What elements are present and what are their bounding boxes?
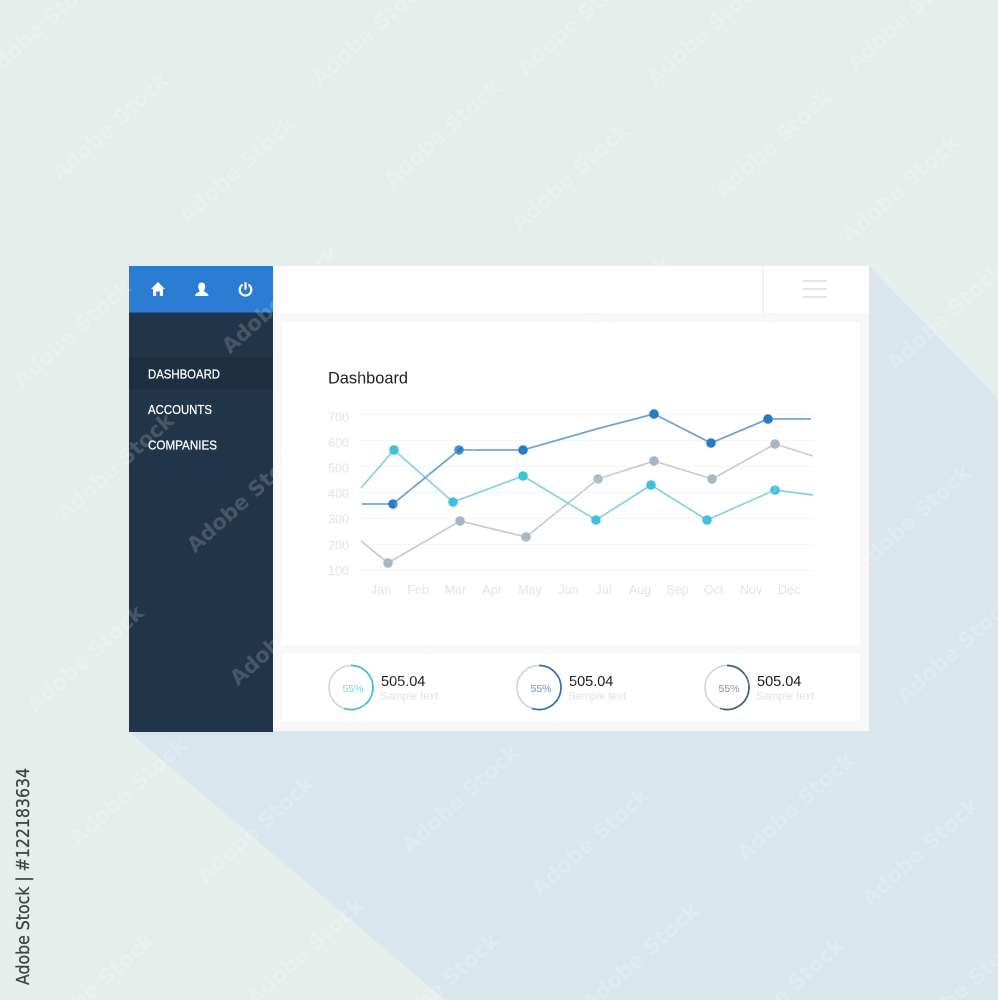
y axis labels: 500 bbox=[328, 462, 349, 476]
long shadow bbox=[129, 266, 998, 1000]
y axis labels bbox=[328, 410, 349, 578]
x axis labels: Aug bbox=[629, 583, 651, 597]
stat 3: Sample text bbox=[756, 690, 814, 702]
stat 2 bbox=[517, 666, 626, 710]
heading: Dashboard bbox=[328, 370, 408, 388]
y axis labels: 100 bbox=[328, 564, 349, 578]
icon: power bbox=[240, 283, 251, 296]
watermarks: Adobe Stock bbox=[837, 130, 964, 247]
watermarks: Adobe Stock bbox=[182, 440, 309, 557]
watermarks: Adobe Stock bbox=[689, 615, 816, 732]
stat 3: 55% bbox=[718, 683, 740, 695]
stat 2: 505.04 bbox=[569, 674, 613, 690]
x axis labels: Oct bbox=[704, 583, 724, 597]
line chart bbox=[328, 409, 813, 597]
stat 3 bbox=[705, 666, 814, 710]
watermarks: Adobe Stock bbox=[397, 740, 524, 857]
panel: stats card bbox=[282, 654, 860, 721]
watermarks: Adobe Stock bbox=[355, 608, 482, 725]
panel: chart card bbox=[282, 322, 860, 645]
watermarks: Adobe Stock bbox=[65, 733, 192, 850]
watermarks: Adobe Stock bbox=[710, 85, 837, 202]
x axis labels: Feb bbox=[407, 583, 429, 597]
stat 2: Sample text bbox=[568, 690, 626, 702]
watermarks: Adobe Stock bbox=[732, 748, 859, 865]
x axis labels: Apr bbox=[482, 583, 502, 597]
x axis labels: May bbox=[518, 583, 543, 597]
icon: user bbox=[195, 282, 208, 296]
watermarks: Adobe Stock bbox=[52, 408, 179, 525]
nav item: dashboard: DASHBOARD bbox=[148, 368, 220, 382]
x axis labels bbox=[371, 583, 800, 597]
stock id label: Adobe Stock | #122183634 bbox=[13, 768, 34, 985]
stat 1: 505.04 bbox=[381, 674, 425, 690]
watermarks: Adobe Stock bbox=[849, 460, 976, 577]
watermarks: Adobe Stock bbox=[217, 241, 344, 358]
stat 1 bbox=[329, 666, 438, 710]
watermarks: Adobe Stock bbox=[387, 405, 514, 522]
watermarks: Adobe Stock bbox=[507, 118, 634, 235]
watermarks: Adobe Stock bbox=[549, 251, 676, 368]
series: teal bbox=[361, 445, 813, 525]
watermarks: Adobe Stock bbox=[22, 600, 149, 717]
watermarks: Adobe Stock bbox=[379, 75, 506, 192]
y axis labels: 400 bbox=[328, 487, 349, 501]
watermarks: Adobe Stock bbox=[225, 573, 352, 690]
watermarks: Adobe Stock bbox=[515, 443, 642, 560]
x axis labels: Sep bbox=[666, 583, 689, 597]
stat 1: 55% bbox=[342, 683, 364, 695]
x axis labels: Jun bbox=[558, 583, 579, 597]
x axis labels: Jul bbox=[596, 583, 611, 597]
watermarks: Adobe Stock bbox=[562, 571, 689, 688]
icon: home bbox=[151, 282, 165, 296]
top bar bbox=[273, 266, 869, 313]
series: grey bbox=[361, 439, 813, 568]
x axis labels: Nov bbox=[740, 583, 763, 597]
x axis labels: Mar bbox=[445, 583, 466, 597]
x axis labels: Dec bbox=[778, 583, 800, 597]
nav item: accounts: ACCOUNTS bbox=[148, 403, 212, 417]
icon: hamburger menu bbox=[803, 280, 827, 298]
watermarks: Adobe Stock bbox=[527, 783, 654, 900]
watermarks: Adobe Stock bbox=[9, 275, 136, 392]
watermarks: Adobe Stock bbox=[47, 68, 174, 185]
y axis labels: 600 bbox=[328, 436, 349, 450]
stat 2: 55% bbox=[530, 683, 552, 695]
stat 3: 505.04 bbox=[757, 674, 801, 690]
watermarks: Adobe Stock bbox=[857, 793, 984, 910]
sidebar icon header bbox=[129, 266, 273, 312]
dashboard panel bbox=[129, 266, 869, 732]
watermarks: Adobe Stock bbox=[347, 268, 474, 385]
watermarks: Adobe Stock bbox=[722, 415, 849, 532]
x axis labels: Jan bbox=[371, 583, 391, 597]
nav item: dashboard bbox=[129, 357, 273, 389]
y axis labels: 200 bbox=[328, 538, 349, 552]
sidebar bbox=[129, 266, 273, 732]
series: blue bbox=[362, 409, 811, 509]
y axis labels: 300 bbox=[328, 512, 349, 526]
watermarks: Adobe Stock bbox=[192, 771, 319, 888]
watermarks: Adobe Stock bbox=[174, 111, 301, 228]
nav item: companies: COMPANIES bbox=[148, 438, 217, 452]
stat 1: Sample text bbox=[380, 690, 438, 702]
watermarks: Adobe Stock bbox=[677, 288, 804, 405]
y axis labels: 700 bbox=[328, 410, 349, 424]
